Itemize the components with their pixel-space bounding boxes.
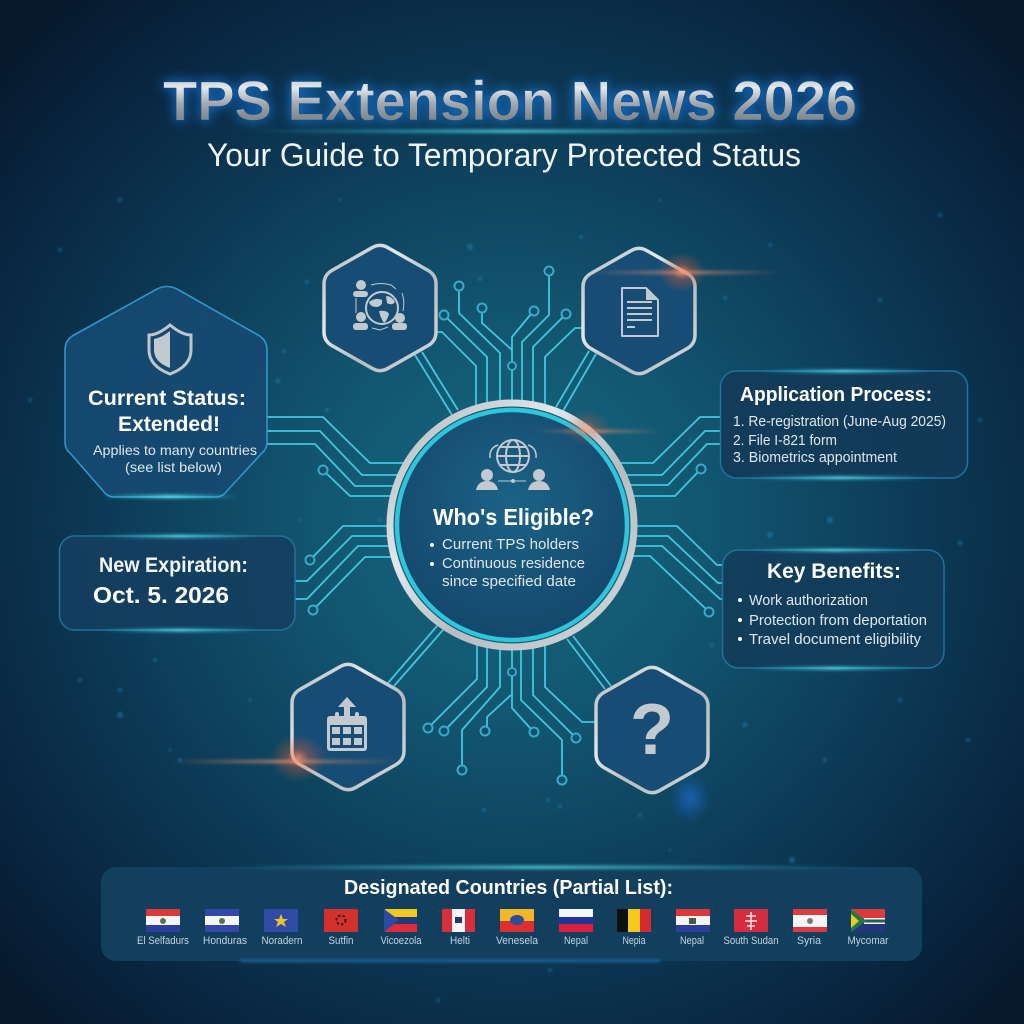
flag: Nepia bbox=[617, 909, 651, 947]
numbered steps: 2. File I-821 form bbox=[733, 433, 837, 449]
icon: globe and people bbox=[476, 440, 550, 490]
panel: application process bbox=[720, 370, 968, 479]
flag: Sutfin: Sutfin bbox=[328, 935, 354, 947]
bullet list: Current TPS holders bbox=[442, 536, 579, 553]
numbered steps bbox=[733, 414, 946, 466]
flag: Noradern: Noradern bbox=[262, 935, 302, 947]
bullet list: Work authorization bbox=[749, 593, 868, 609]
orange flare: top right hexagon bbox=[590, 252, 780, 292]
subtitle: Your Guide to Temporary Protected Status bbox=[207, 137, 801, 173]
title underline bbox=[250, 130, 780, 132]
circuit traces bbox=[266, 266, 724, 784]
note bbox=[93, 442, 257, 475]
bullet list bbox=[430, 536, 585, 590]
panel: new expiration bbox=[60, 535, 295, 632]
heading: Key Benefits: bbox=[767, 560, 901, 583]
flag: Vicoezola: Vicoezola bbox=[380, 935, 422, 947]
panel: key benefits bbox=[722, 549, 944, 670]
orange flare: central circle bbox=[535, 410, 660, 446]
flag: El Selfadurs: El Selfadurs bbox=[137, 935, 189, 947]
orange flare: calendar hexagon bbox=[170, 734, 400, 782]
flag: South Sudan: South Sudan bbox=[724, 935, 778, 947]
icon: shield bbox=[149, 325, 191, 374]
bullet list bbox=[738, 593, 927, 648]
panel: current status bbox=[65, 286, 267, 498]
bullet list: Travel document eligibility bbox=[749, 632, 922, 648]
hexagon: question mark bbox=[596, 667, 708, 793]
background particles bbox=[28, 198, 982, 1002]
flag: Sutfin bbox=[324, 909, 358, 947]
heading: Current Status: bbox=[88, 387, 246, 410]
numbered steps: 3. Biometrics appointment bbox=[733, 450, 897, 466]
flag: Noradern bbox=[262, 909, 302, 947]
circuit nodes bbox=[306, 266, 714, 784]
blue glow spot bbox=[670, 774, 710, 822]
icon: globe with people bbox=[353, 280, 407, 330]
panel: designated countries bbox=[101, 866, 922, 962]
bullet list: Continuous residence bbox=[442, 555, 585, 572]
flag: Helti: Helti bbox=[450, 935, 470, 947]
flag: Syria bbox=[793, 909, 827, 947]
icon: calendar with arrow bbox=[327, 697, 367, 751]
heading: New Expiration: bbox=[99, 554, 248, 577]
heading: Who's Eligible? bbox=[433, 504, 594, 530]
central circle: who's eligible bbox=[390, 403, 634, 647]
flag: Vicoezola bbox=[380, 909, 422, 947]
heading: Designated Countries (Partial List): bbox=[344, 876, 673, 899]
flag: El Selfadurs bbox=[137, 909, 189, 947]
bullet list: since specified date bbox=[442, 573, 576, 590]
note: (see list below) bbox=[125, 459, 222, 475]
hexagon: global community icon bbox=[324, 245, 436, 371]
hexagon: document icon bbox=[583, 248, 695, 374]
flag: Nepal: Nepal bbox=[564, 935, 588, 947]
flag: Nepal bbox=[559, 909, 593, 947]
flag: Mycomar bbox=[848, 909, 889, 947]
flag: Helti bbox=[442, 909, 475, 947]
icon: document bbox=[622, 288, 658, 336]
flag: Venesela: Venesela bbox=[496, 935, 539, 947]
flag: Syria: Syria bbox=[797, 935, 822, 947]
flag: Honduras bbox=[203, 909, 247, 947]
flag: Honduras: Honduras bbox=[203, 935, 247, 947]
title: TPS Extension News 2026 bbox=[163, 69, 857, 132]
flag: Nepia: Nepia bbox=[622, 935, 646, 947]
heading: Application Process: bbox=[740, 384, 932, 406]
flag: South Sudan bbox=[724, 909, 778, 947]
flag: Venesela bbox=[496, 909, 539, 947]
date: Oct. 5. 2026 bbox=[93, 582, 229, 608]
bullet list: Protection from deportation bbox=[749, 613, 927, 629]
heading value: Extended! bbox=[118, 413, 220, 436]
flag: Nepal: Nepal bbox=[680, 935, 704, 947]
numbered steps: 1. Re-registration (June-Aug 2025) bbox=[733, 414, 946, 430]
note: Applies to many countries bbox=[93, 442, 257, 458]
hexagon: calendar icon bbox=[292, 664, 404, 790]
flag: Nepal bbox=[676, 909, 710, 947]
icon: question mark: ? bbox=[630, 690, 674, 770]
flag: Mycomar: Mycomar bbox=[848, 935, 889, 947]
